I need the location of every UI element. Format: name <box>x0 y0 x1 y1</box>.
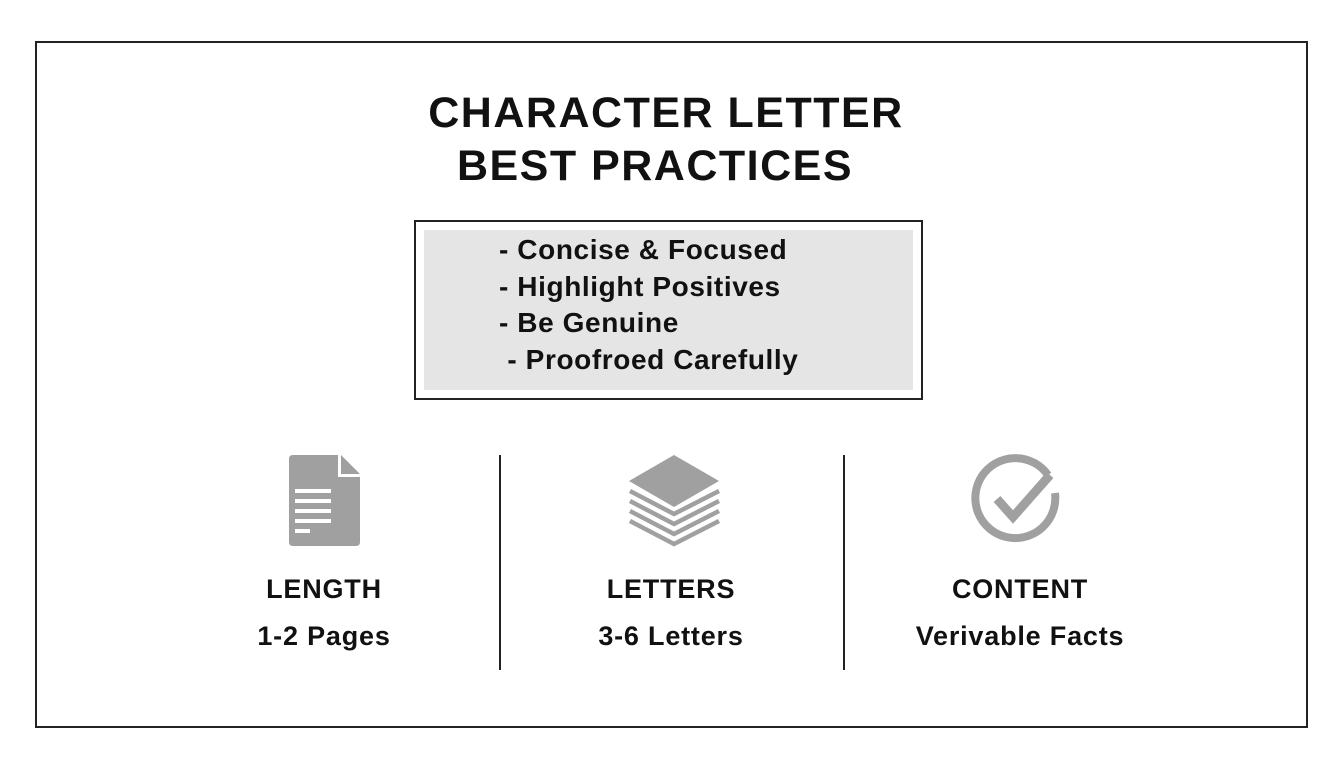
label: length <box>257 574 391 651</box>
label: letters: LETTERS <box>607 574 735 604</box>
title: BEST PRACTICES <box>457 142 853 190</box>
label: length: LENGTH <box>266 574 382 604</box>
title <box>428 89 904 190</box>
bullet list: - Highlight Positives <box>499 270 781 302</box>
label: letters <box>598 574 744 651</box>
label: length: 1-2 Pages <box>257 621 391 651</box>
bullet list <box>499 234 798 375</box>
bullet list: - Proofroed Carefully <box>507 344 798 374</box>
divider <box>843 455 845 670</box>
bullet list: - Concise & Focused <box>499 234 787 265</box>
bullet list: - Be Genuine <box>499 307 679 338</box>
icon: check circle <box>971 454 1060 542</box>
icon: document <box>289 455 360 546</box>
title: CHARACTER LETTER <box>428 89 904 137</box>
label: content <box>916 574 1124 651</box>
divider <box>499 455 501 670</box>
label: content: CONTENT <box>952 574 1088 604</box>
panel: practices list <box>414 220 923 400</box>
label: content: Verivable Facts <box>916 621 1124 651</box>
icon: stacked layers <box>629 455 720 546</box>
label: letters: 3-6 Letters <box>598 621 744 651</box>
